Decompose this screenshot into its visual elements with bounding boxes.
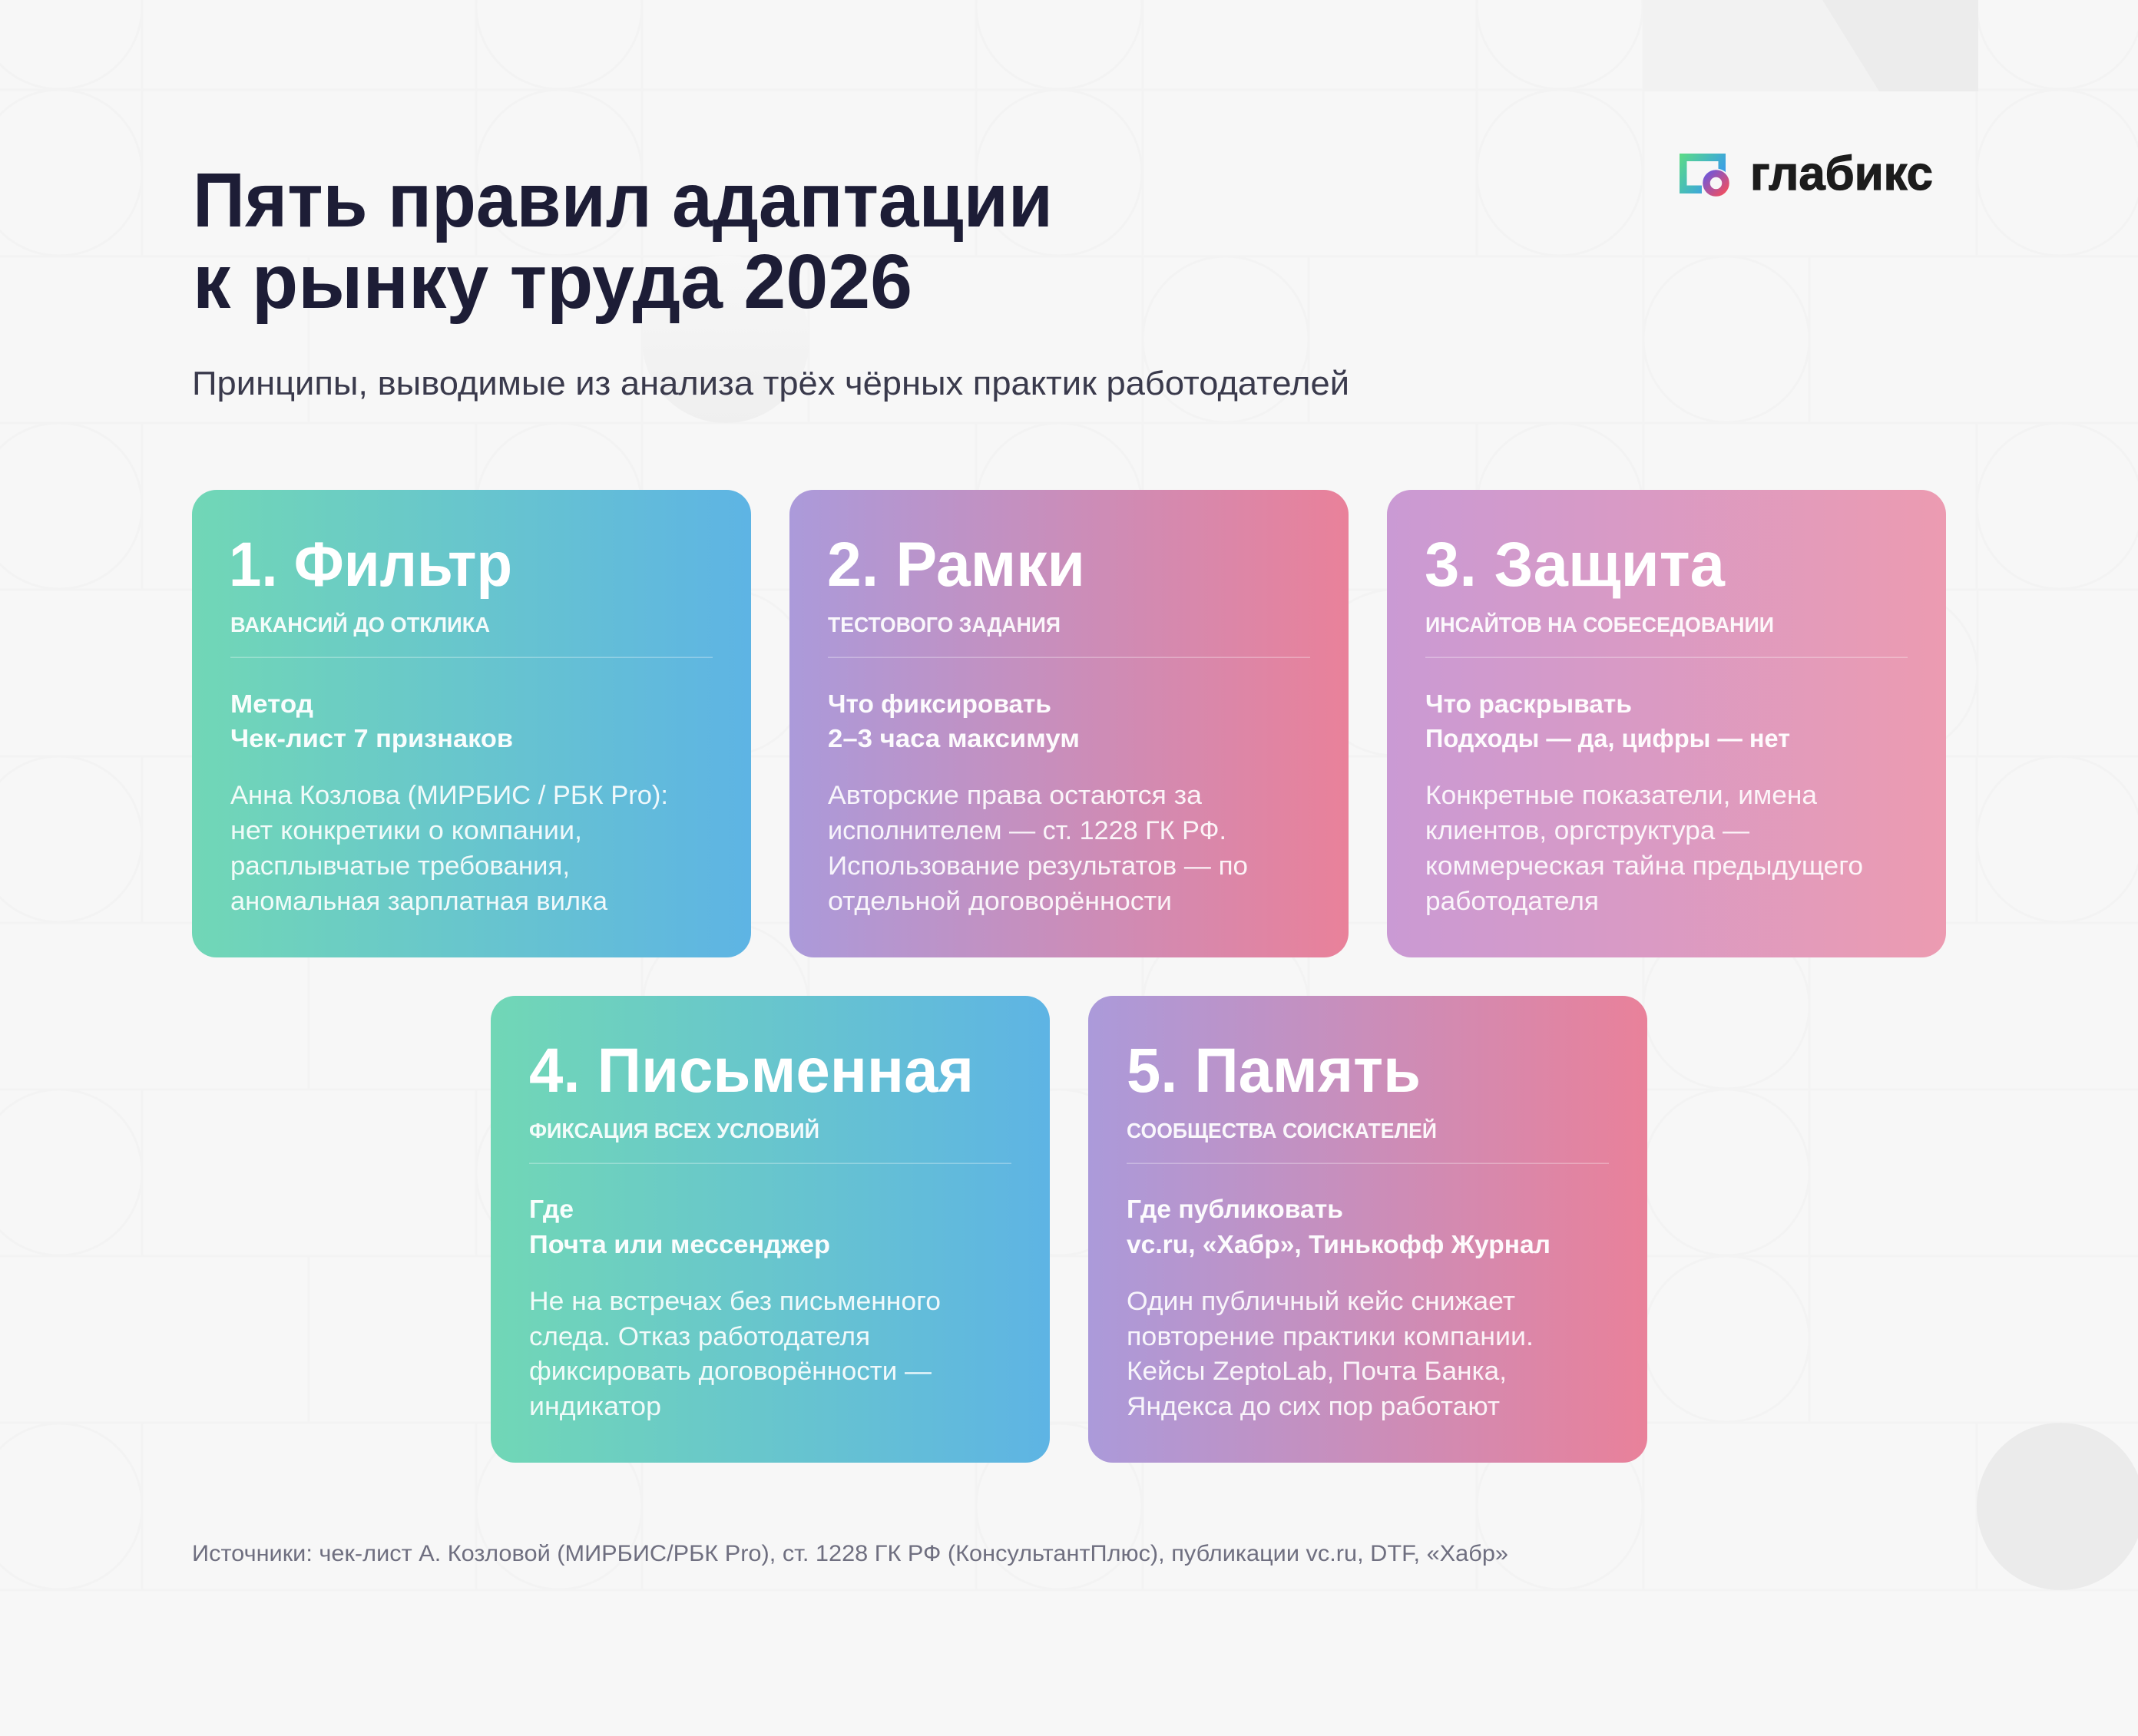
panel: rule 3 protection [1387, 490, 1946, 957]
card subheading: ИНСАЙТОВ НА СОБЕСЕДОВАНИИ [1425, 612, 1774, 637]
method label: Чек-лист 7 признаков [230, 724, 513, 752]
card description: нет конкретики о компании, [230, 816, 582, 845]
card description: фиксировать договорённости — [529, 1357, 932, 1386]
title: к рынку труда 2026 [193, 239, 912, 325]
card description: Один публичный кейс снижает [1127, 1287, 1515, 1316]
card description: исполнителем — ст. 1228 ГК РФ. [828, 816, 1226, 845]
card description: Яндекса до сих пор работают [1127, 1392, 1500, 1421]
source note: Источники: чек-лист А. Козловой (МИРБИС/РБК Pro), ст. 1228 ГК РФ (КонсультантПлюс), публикации vc.ru, DTF, «Хабр» [192, 1541, 1508, 1566]
card description: Авторские права остаются за [828, 781, 1202, 810]
card subheading: ТЕСТОВОГО ЗАДАНИЯ [828, 613, 1061, 637]
where to publish label: vc.ru, «Хабр», Тинькофф Журнал [1127, 1230, 1551, 1258]
where to publish label [1127, 1195, 1551, 1258]
panel: rule 4 written [491, 996, 1050, 1463]
title [193, 157, 1053, 325]
card description: работодателя [1425, 887, 1599, 916]
what to record label: 2–3 часа максимум [828, 724, 1080, 752]
what to disclose label: Подходы — да, цифры — нет [1425, 724, 1790, 752]
logo wordmark: глабикс [1750, 147, 1933, 200]
subtitle: Принципы, выводимые из анализа трёх чёрных практик работодателей [192, 365, 1349, 402]
what to record label: Что фиксировать [828, 689, 1051, 718]
card description: индикатор [529, 1392, 661, 1421]
panel: rule 1 filter [192, 490, 751, 957]
card heading: 5. Память [1127, 1036, 1421, 1106]
card description: Не на встречах без письменного [529, 1287, 941, 1316]
panel: rule 5 memory [1088, 996, 1647, 1463]
card subheading: ФИКСАЦИЯ ВСЕХ УСЛОВИЙ [529, 1118, 819, 1142]
where label: Почта или мессенджер [529, 1230, 830, 1258]
where label [529, 1195, 830, 1258]
what to record label [828, 689, 1080, 752]
card description: Анна Козлова (МИРБИС / РБК Pro): [230, 781, 668, 810]
card description [1127, 1287, 1534, 1421]
card description: отдельной договорённости [828, 887, 1172, 916]
card description: Использование результатов — по [828, 851, 1248, 881]
what to disclose label: Что раскрывать [1425, 689, 1632, 718]
card description: Кейсы ZeptoLab, Почта Банка, [1127, 1357, 1507, 1386]
card description: следа. Отказ работодателя [529, 1322, 870, 1351]
card description [1425, 781, 1863, 916]
card subheading: СООБЩЕСТВА СОИСКАТЕЛЕЙ [1127, 1118, 1437, 1142]
card description [828, 781, 1248, 916]
card heading: 3. Защита [1425, 530, 1726, 600]
title: Пять правил адаптации [193, 157, 1053, 243]
where label: Где [529, 1195, 574, 1223]
method label [230, 689, 513, 752]
where to publish label: Где публиковать [1127, 1195, 1343, 1223]
icon: logo mark [1680, 154, 1731, 198]
card subheading: ВАКАНСИЙ ДО ОТКЛИКА [230, 612, 490, 637]
card description: повторение практики компании. [1127, 1322, 1534, 1351]
card description: клиентов, оргструктура — [1425, 816, 1749, 845]
card description: коммерческая тайна предыдущего [1425, 851, 1863, 881]
card description: аномальная зарплатная вилка [230, 887, 607, 916]
what to disclose label [1425, 689, 1790, 752]
card description: Конкретные показатели, имена [1425, 781, 1817, 810]
card heading: 1. Фильтр [229, 530, 512, 600]
card description [230, 781, 668, 916]
method label: Метод [230, 689, 313, 718]
card heading: 2. Рамки [827, 530, 1085, 600]
card description [529, 1287, 941, 1421]
card heading: 4. Письменная [529, 1036, 974, 1106]
logo: glabix [1680, 147, 1933, 200]
panel: rule 2 frames [789, 490, 1349, 957]
card description: расплывчатые требования, [230, 851, 570, 881]
